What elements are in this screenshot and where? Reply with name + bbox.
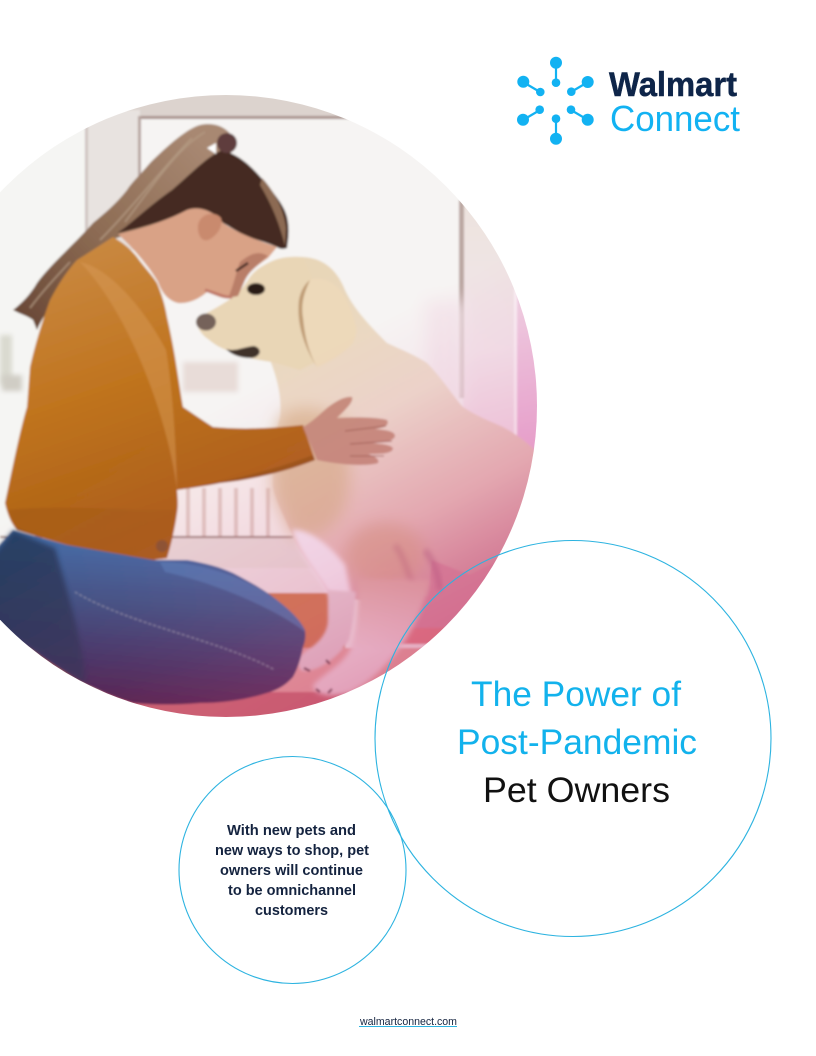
hair tie: [217, 133, 237, 153]
golden retriever: [196, 257, 545, 695]
hair strands: [30, 132, 205, 308]
small outline circle: [179, 756, 406, 984]
dog fur folds: [394, 544, 412, 580]
floor strip beside rear: [400, 626, 445, 645]
ponytail: [13, 124, 232, 330]
title line 3: Pet Owners: [483, 771, 670, 810]
panel: circular photo of woman and dog: [0, 90, 560, 738]
logo wordmark: Connect: Connect: [610, 98, 740, 139]
logo: Walmart Connect: [517, 57, 740, 145]
window sill: [160, 538, 340, 595]
text block: small circle copy: With new pets and: [227, 823, 356, 839]
dog body: [270, 257, 545, 600]
hair: ponytail and head: [13, 124, 289, 330]
dark hair on head: [117, 150, 289, 249]
dog white chest patch: [292, 530, 352, 598]
text block: small circle copy: new ways to shop, pet: [215, 843, 369, 859]
sweater shoulder highlight: [80, 262, 177, 490]
large outline circle: [375, 540, 771, 936]
logo wordmark: Walmart: Walmart: [609, 66, 737, 104]
dog front leg near: [313, 580, 430, 695]
footer link: walmartconnect.com: [359, 1016, 457, 1028]
sweater button: [156, 540, 168, 552]
icon: network spark: [517, 57, 594, 145]
blue jeans: [0, 530, 305, 704]
dog rear body behind legs: [410, 560, 496, 630]
woman's hand on dog: [303, 397, 395, 465]
blurred outdoor shapes: [0, 300, 465, 410]
dog paw marks: [304, 660, 332, 693]
sleeve shading: [210, 456, 314, 484]
window frame: [84, 95, 537, 450]
title line 1: The Power of: [471, 675, 681, 714]
dog front leg far: [299, 590, 356, 671]
dog tan belly fur: [345, 523, 425, 587]
wooden floor: [26, 592, 422, 717]
jeans highlight: [160, 562, 305, 632]
text block: small circle copy: [215, 823, 369, 919]
sweater hem: [10, 509, 50, 538]
title line 2: Post-Pandemic: [457, 723, 697, 762]
jeans seam: [75, 592, 275, 670]
orange sweater: [5, 237, 315, 560]
face and neck: [118, 208, 277, 303]
pink and purple colour overlay: [0, 311, 537, 717]
text block: small circle copy: to be omnichannel: [228, 883, 356, 899]
radiator: [0, 486, 294, 540]
photo background: bright window: [0, 130, 278, 562]
dog eye: [247, 283, 265, 295]
title: [457, 675, 697, 810]
text block: small circle copy: customers: [255, 903, 328, 919]
dog ear: [317, 355, 336, 364]
jeans dark seat: [0, 530, 85, 684]
dog nose: [196, 314, 216, 330]
text block: small circle copy: owners will continue: [220, 863, 363, 879]
dog shaded chest fur: [273, 408, 350, 537]
dog mouth: [226, 346, 260, 358]
dog head: [196, 257, 320, 370]
